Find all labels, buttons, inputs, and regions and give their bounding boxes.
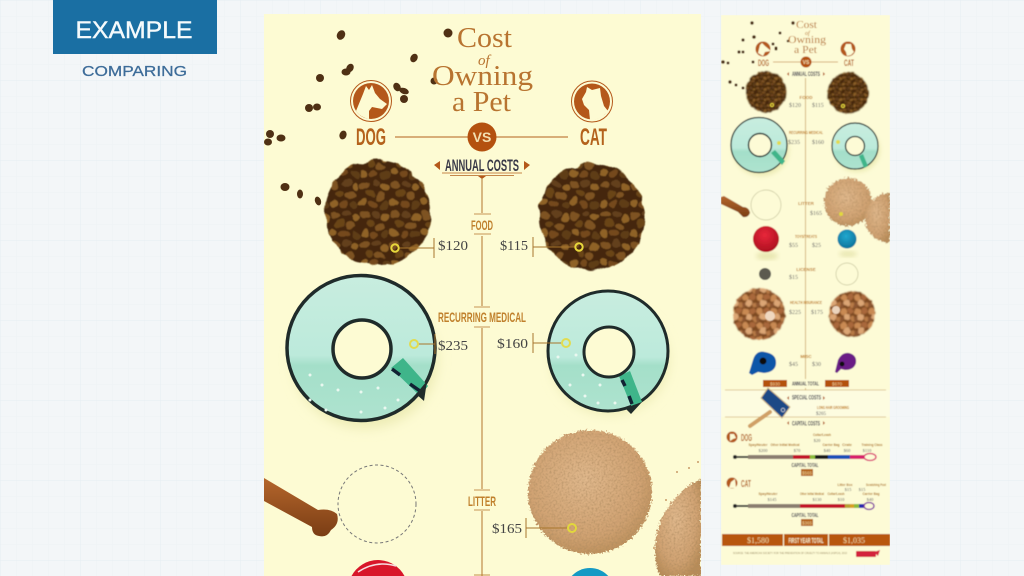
thumbnail coin piles [733,288,875,340]
thumbnail cat leash chart: Spay/Neuter [758,492,778,496]
callout: cat food $115: $115 [500,238,528,253]
empty dashed circle: dog has no litter cost [338,465,416,543]
thumbnail annual total: ANNUAL TOTAL [792,382,819,388]
thumbnail sponsor logo [856,550,880,557]
thumbnail title: Owning [788,35,827,46]
callout: dog food $120: $120 [438,238,468,253]
thumbnail cat leash chart: Collar/Leash [828,492,845,496]
thumbnail balls and tag [753,226,858,285]
thumbnail title [788,20,827,56]
thumbnail cat leash chart: CAPITAL TOTAL [792,513,819,519]
thumbnail timeline [804,78,806,390]
thumbnail icons and header [756,42,856,78]
thumbnail kibble piles [746,72,868,114]
thumbnail annual total: $670 [832,382,843,386]
thumbnail row labels: FOOD [800,95,813,100]
label: litter [468,489,496,511]
thumbnail special costs: $265 [816,412,826,417]
thumbnail dog leash chart: Other Initial Medical [770,443,800,447]
toy: blue ball [572,568,608,576]
thumbnail row labels: RECURRING MEDICAL [789,130,823,135]
medical: cat cone collar [548,291,668,414]
thumbnail cat leash chart: $145 [768,497,777,502]
thumbnail capital costs heading: CAPITAL COSTS [792,420,820,428]
thumbnail annual total: $930 [770,382,781,386]
panel: main infographic [264,14,701,576]
thumbnail dog leash chart: $200 [758,448,768,453]
thumbnail dog leash chart: DOG [741,433,752,444]
thumbnail prices: $115 [812,102,824,109]
thumbnail special costs [721,388,890,426]
thumbnail dog leash chart: $40 [824,448,831,453]
thumbnail cat leash chart: $130 [812,497,822,502]
thumbnail capital costs heading [787,420,825,428]
thumbnail bone, litter and dashed circle [721,178,890,243]
litter: side pile [653,461,701,576]
thumbnail row labels [789,95,823,359]
thumbnail row labels: MISC [800,354,812,359]
callout: cat medical $160 [497,333,570,353]
thumbnail prices: $25 [812,242,821,249]
title [433,28,532,112]
thumbnail cat leash chart: Other Initial Medical [800,492,824,496]
panel: full infographic thumbnail [721,15,890,565]
thumbnail dog leash chart: $70 [794,448,801,453]
thumbnail prices: $15 [789,274,798,281]
scattered kibble [264,28,452,206]
title: Cost [457,23,512,54]
thumbnail special costs: SPECIAL COSTS [792,394,821,402]
title: of [478,53,492,69]
thumbnail scattered kibble [721,21,795,89]
thumbnail row labels: LICENSE [796,267,816,272]
thumbnail dog leash chart: Collar/Leash [813,433,832,437]
label: food: FOOD [471,217,493,233]
heading: annual costs [434,160,530,178]
icon: dog [350,80,392,122]
callout: cat litter $165: $165 [492,521,522,536]
thumbnail dog leash chart: CAPITAL TOTAL [792,463,819,469]
thumbnail row labels: HEALTH INSURANCE [790,300,822,305]
thumbnail icons and header: ANNUAL COSTS [792,71,820,78]
tick: toys and treats [474,574,490,576]
versus divider: VS [473,129,491,145]
thumbnail prices: $120 [789,102,801,109]
thumbnail cat leash chart: Litter Box [838,483,853,487]
thumbnail cat leash chart: $365 [802,520,813,526]
thumbnail title: of [805,30,811,37]
thumbnail prices: $160 [812,139,824,146]
versus divider [395,122,568,152]
toy: red ball [352,560,404,576]
thumbnail cat leash chart: CAT [741,479,751,490]
thumbnail cat leash chart [726,478,887,526]
thumbnail dog leash chart: $110 [863,448,872,453]
thumbnail first year total bar: FIRST YEAR TOTAL [788,538,824,545]
thumbnail prices: $225 [789,309,801,316]
thumbnail first year total bar: $1,035 [843,536,865,545]
thumbnail cat leash chart: $10 [838,497,845,502]
thumbnail row labels: TOYS/TREATS [795,234,817,239]
thumbnail icons and header: VS [803,60,810,66]
label: dog: DOG [356,124,386,151]
thumbnail prices: $45 [789,361,798,368]
icon: chew bone [264,478,338,536]
thumbnail dog leash chart: Carrier Bag [822,443,840,447]
thumbnail title: Cost [796,20,817,31]
thumbnail dog leash chart: $20 [814,438,821,443]
heading: annual costs: ANNUAL COSTS [445,156,519,175]
thumbnail dog leash chart: Training Class [862,443,882,447]
title: a Pet [452,87,511,118]
thumbnail special costs: LONG HAIR GROOMING [817,405,849,410]
thumbnail annual total [763,379,849,388]
thumbnail prices [788,102,824,368]
example badge [53,0,217,54]
thumbnail title: a Pet [794,45,817,56]
thumbnail dog leash chart [726,432,882,476]
title: Owning [432,61,533,92]
label: cat: CAT [580,124,607,151]
label: recurring medical: RECURRING MEDICAL [438,309,526,325]
callout: dog medical $235: $235 [438,338,468,353]
thumbnail prices: $175 [811,309,823,316]
medical: dog cone collar [287,276,437,428]
callout: dog food $120 [391,238,468,258]
thumbnail dog leash chart: $60 [844,448,851,453]
example badge: EXAMPLE [76,17,192,44]
thumbnail cat leash chart: $15 [859,487,866,492]
thumbnail dog leash chart: Crate [842,443,852,447]
thumbnail dog leash chart: Spay/Neuter [748,443,768,447]
thumbnail cat leash chart: $15 [845,487,852,492]
callout: cat medical $160: $160 [497,336,528,351]
thumbnail first year total bar [722,534,890,546]
thumbnail ribbons [749,352,856,375]
thumbnail cat leash chart: Scratching Post [866,483,887,487]
central timeline [482,178,483,576]
thumbnail cat leash chart: $40 [867,497,874,502]
thumbnail prices: $30 [812,361,821,368]
thumbnail row labels: LITTER [798,201,815,206]
thumbnail cone collars [731,118,880,176]
thumbnail icons and header: CAT [844,58,854,68]
icon: cat [572,81,612,122]
thumbnail icons and header: DOG [758,58,769,68]
callout: dog medical $235 [410,334,468,354]
food: dog kibble pile [325,160,431,266]
litter: cat pile [528,430,652,554]
thumbnail source line: SOURCE: THE AMERICAN SOCIETY FOR THE PREVENTION OF CRUELTY TO ANIMALS (ASPCA), 2013 [733,551,847,555]
callout: cat food $115 [500,237,583,257]
callout: cat litter $165 [492,518,576,538]
label: food [472,213,493,236]
subtitle: comparing: COMPARING [82,63,187,80]
thumbnail cat leash chart: Carrier Bag [862,492,880,496]
food: cat kibble pile [539,164,645,270]
thumbnail first year total bar: $1,580 [747,536,769,545]
thumbnail dog leash chart: $565 [802,470,813,476]
thumbnail prices: $55 [789,242,798,249]
thumbnail prices: $165 [810,210,822,217]
thumbnail prices: $235 [788,139,800,146]
label: litter: LITTER [468,493,496,509]
label: recurring medical [436,306,528,328]
